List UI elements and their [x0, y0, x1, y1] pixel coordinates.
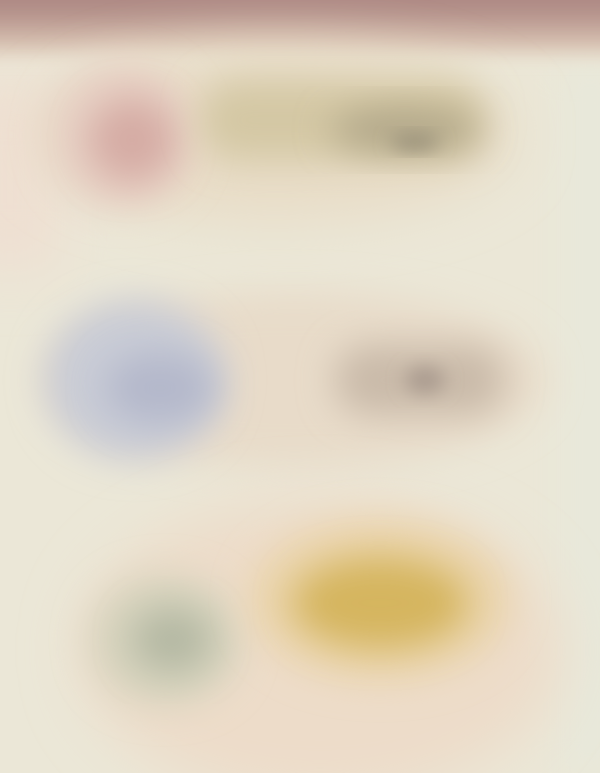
right pale strip [560, 60, 600, 773]
panel: bottom row [80, 500, 560, 773]
yellow block [292, 557, 468, 649]
panel: top row [35, 50, 515, 220]
dark spot: top row [391, 134, 439, 150]
icon: grey-green circle halo [90, 575, 240, 705]
left warm tint [0, 80, 60, 270]
yellow halo [250, 520, 510, 680]
icon: pink circle [88, 98, 176, 182]
icon: pink circle halo [50, 63, 194, 207]
text detail: top row [330, 108, 480, 152]
halo: top row [35, 50, 515, 220]
icon: blue circle halo [45, 300, 225, 460]
dark spot: middle row [405, 366, 445, 394]
icon: blue circle [105, 352, 215, 424]
header band [0, 0, 600, 54]
halo: middle row [45, 292, 545, 468]
warm bottom area [80, 500, 560, 773]
panel: middle row [45, 292, 545, 468]
text block: top row [200, 80, 485, 160]
icon: grey-green circle [132, 608, 212, 672]
text block: middle row [335, 345, 505, 415]
